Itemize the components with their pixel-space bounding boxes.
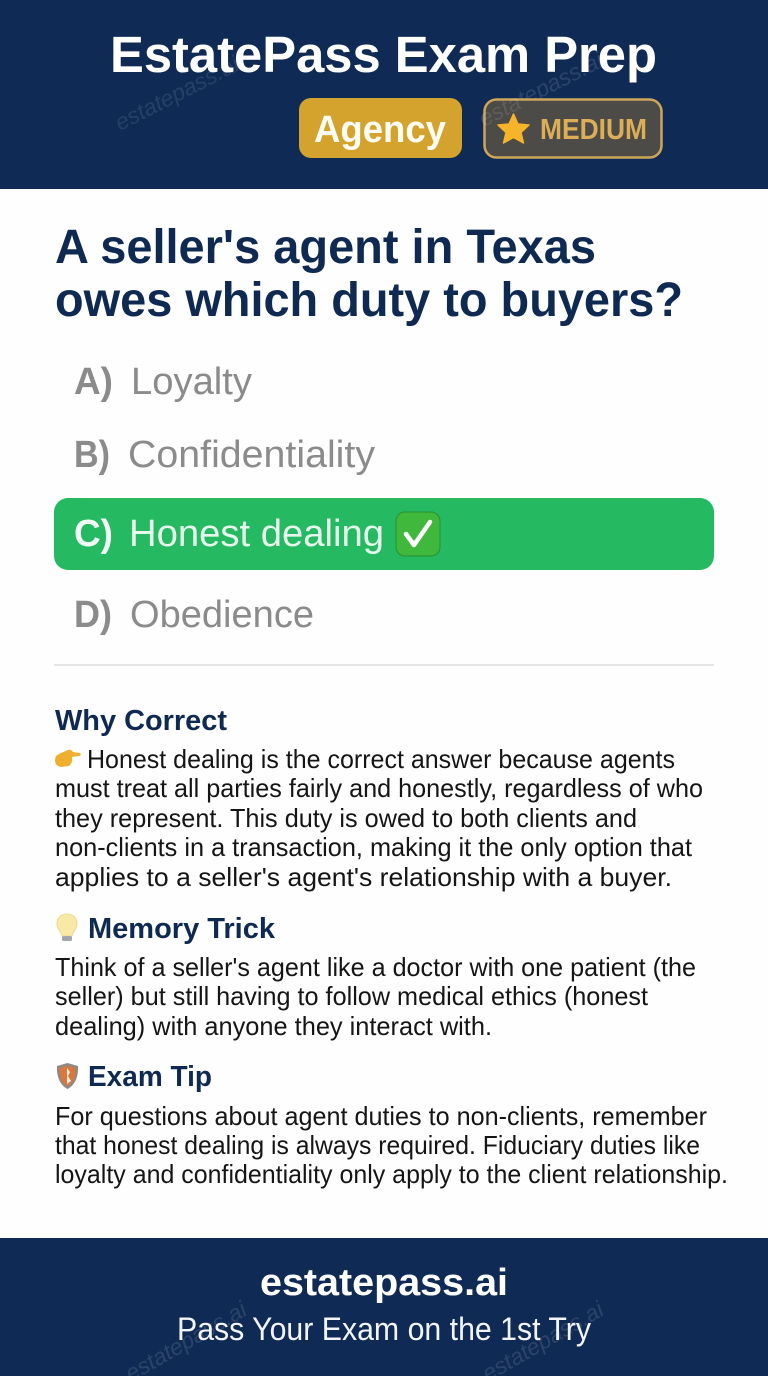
option D: Obedience xyxy=(130,594,314,636)
badge: Medium: esta xyxy=(474,89,525,131)
option C: correct answer: Honest dealing xyxy=(129,513,384,555)
option A xyxy=(74,361,252,403)
badge: Medium: MEDIUM xyxy=(540,114,647,146)
body text: why correct xyxy=(55,744,703,892)
header band: estatepass.ai xyxy=(474,46,608,131)
section: why correct xyxy=(55,705,703,892)
option D: D) xyxy=(74,594,112,636)
heading: exam tip: Exam Tip xyxy=(88,1061,212,1093)
option A: A) xyxy=(74,361,113,403)
body text: why correct: applies to a seller's agent's relationship with a buyer. xyxy=(55,862,672,892)
option B: Confidentiality xyxy=(128,434,375,476)
header band xyxy=(0,0,768,189)
body text: exam tip: loyalty and confidentiality only apply to the client relationship. xyxy=(55,1159,728,1189)
icon: star xyxy=(498,114,529,143)
option C: correct answer: C) xyxy=(74,513,113,555)
footer band xyxy=(0,1238,768,1376)
body text: memory trick: Think of a seller's agent like a doctor with one patient (the xyxy=(55,952,696,982)
option C: correct answer xyxy=(54,498,714,570)
footer site name: estatepass.ai xyxy=(260,1262,508,1304)
badge: Agency: Agency xyxy=(314,109,446,151)
heading: why correct: Why Correct xyxy=(55,705,227,737)
body text: why correct: non-clients in a transaction, making it the only option that xyxy=(55,832,693,862)
icon: check mark xyxy=(396,512,440,556)
title: EstatePass Exam Prep xyxy=(110,26,657,83)
section: exam tip xyxy=(55,1061,728,1189)
body text: exam tip xyxy=(55,1101,728,1189)
body text: memory trick: seller) but still having to follow medical ethics (honest xyxy=(55,981,649,1011)
option B: B) xyxy=(74,434,110,476)
body text: exam tip: For questions about agent duties to non-clients, remember xyxy=(55,1101,707,1131)
question heading: A seller's agent in Texas xyxy=(55,221,596,274)
option A: Loyalty xyxy=(131,361,252,403)
question heading: owes which duty to buyers? xyxy=(55,274,683,327)
heading: memory trick: Memory Trick xyxy=(88,913,276,945)
body text: why correct: they represent. This duty is owed to both clients and xyxy=(55,803,637,833)
badge: Agency xyxy=(299,98,462,158)
body text: memory trick xyxy=(55,952,696,1041)
header band: estatepass.ai xyxy=(110,50,244,135)
badge: Medium xyxy=(474,89,662,158)
icon: shield xyxy=(57,1063,78,1089)
icon: light bulb xyxy=(57,914,77,941)
body text: why correct: must treat all parties fairly and honestly, regardless of who xyxy=(55,773,703,803)
body text: exam tip: that honest dealing is always required. Fiduciary duties like xyxy=(55,1130,700,1160)
question heading xyxy=(55,221,683,327)
section: memory trick xyxy=(55,913,696,1041)
body text: memory trick: dealing) with anyone they interact with. xyxy=(55,1011,492,1041)
body text: why correct: Honest dealing is the correct answer because agents xyxy=(87,744,675,774)
icon: pointing hand xyxy=(55,750,81,767)
footer tagline: Pass Your Exam on the 1st Try xyxy=(177,1311,591,1347)
